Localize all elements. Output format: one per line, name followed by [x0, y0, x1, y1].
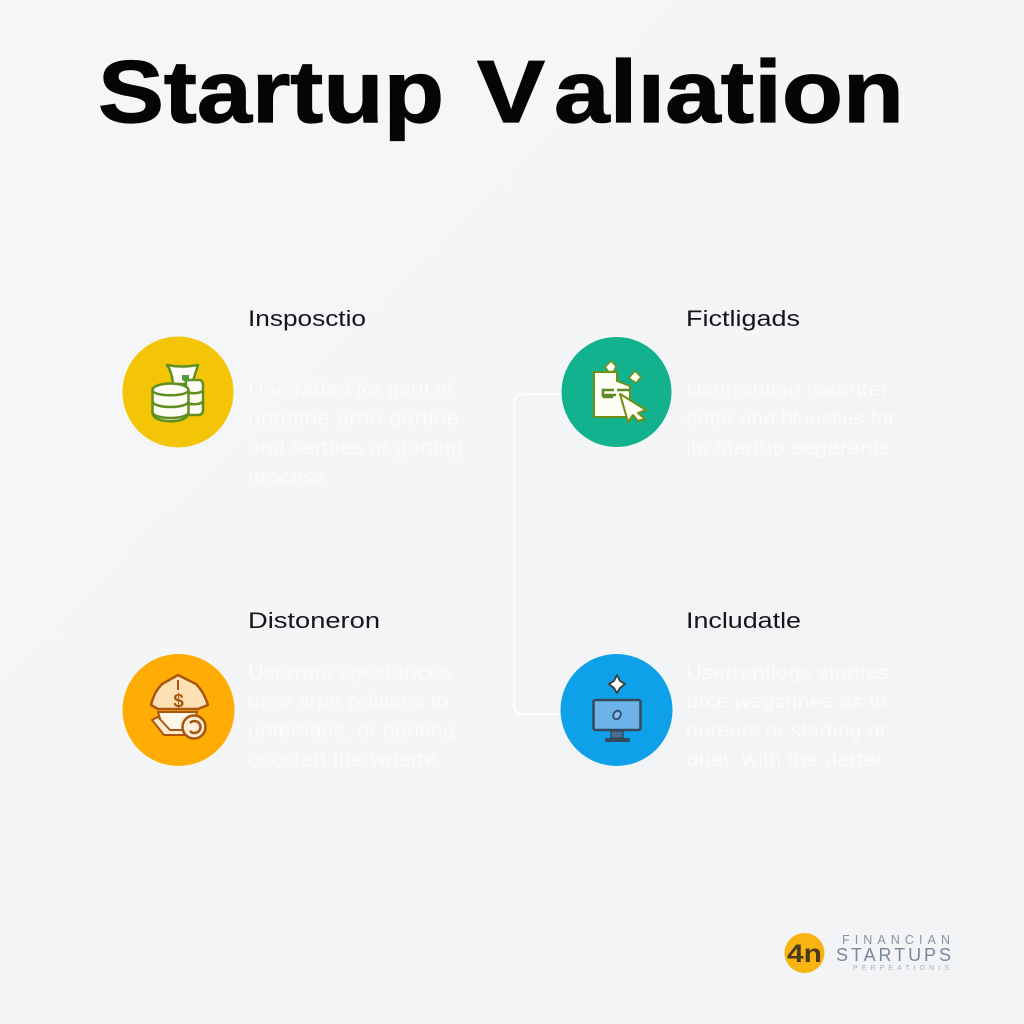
description: Distoneron: Userrate spestarices: [248, 662, 451, 684]
panel: Insposctio: [122, 306, 463, 488]
description: Distoneron: [248, 662, 455, 771]
logo text: [836, 933, 951, 972]
panel: Distoneron: [122, 608, 455, 771]
heading: Fictligads: Fictligads: [686, 306, 800, 331]
description: Fictligads: onter and bluasties for: [686, 408, 896, 430]
panel: Includatle: [560, 608, 889, 771]
description: Includatle: urce wegsrinee as to: [686, 691, 887, 713]
title: Startup: [98, 42, 444, 141]
description: Distoneron: cocstart the wderte.: [248, 749, 443, 771]
panel: Fictligads: [562, 306, 896, 459]
description: Fictligads: Userranting ;seartter: [686, 379, 889, 401]
description: Fictligads: [686, 379, 896, 459]
heading: Insposctio: Insposctio: [248, 306, 366, 331]
title: V: [477, 42, 545, 141]
logo: [784, 933, 951, 973]
logo badge: 4n: [787, 940, 822, 968]
description: Includatle: onet: with the derter.: [686, 749, 888, 771]
logo text: PERPEATIONIS: [853, 965, 949, 972]
icon: blue circle with monitor: [560, 654, 672, 766]
description: Includatle: Userrantiogs sterties: [686, 662, 889, 684]
description: Includatle: [686, 662, 889, 771]
description: Distoneron: urce arpe refitices to: [248, 691, 449, 713]
description: Distoneron: untersads, or geriting: [248, 720, 455, 742]
heading: Distoneron: Distoneron: [248, 608, 380, 633]
description: Insposctio: Unerraded for gerti of: [248, 379, 454, 401]
logo text: FINANCIAN: [842, 933, 950, 947]
title: alıation: [554, 42, 904, 141]
heading: Includatle: Includatle: [686, 608, 801, 633]
icon: green circle with note and cursor: [562, 337, 672, 447]
description: Insposctio: and sertties or garting: [248, 437, 463, 459]
description: Insposctio: process: [248, 466, 325, 488]
description: Includatle: onreers or starting or: [686, 720, 888, 742]
icon: orange circle with helmet and coin: $: [173, 691, 184, 712]
icon: yellow circle with coin stacks: [122, 336, 234, 448]
description: Insposctio: [248, 379, 463, 488]
description: Fictligads: ite startup segarants: [686, 437, 890, 459]
connector line: [514, 394, 562, 714]
description: Insposctio: untetine arne gartine: [248, 408, 459, 430]
icon: orange circle with helmet and coin: [122, 654, 234, 766]
logo text: STARTUPS: [836, 945, 951, 965]
title: [98, 42, 904, 141]
logo badge: [784, 933, 824, 973]
